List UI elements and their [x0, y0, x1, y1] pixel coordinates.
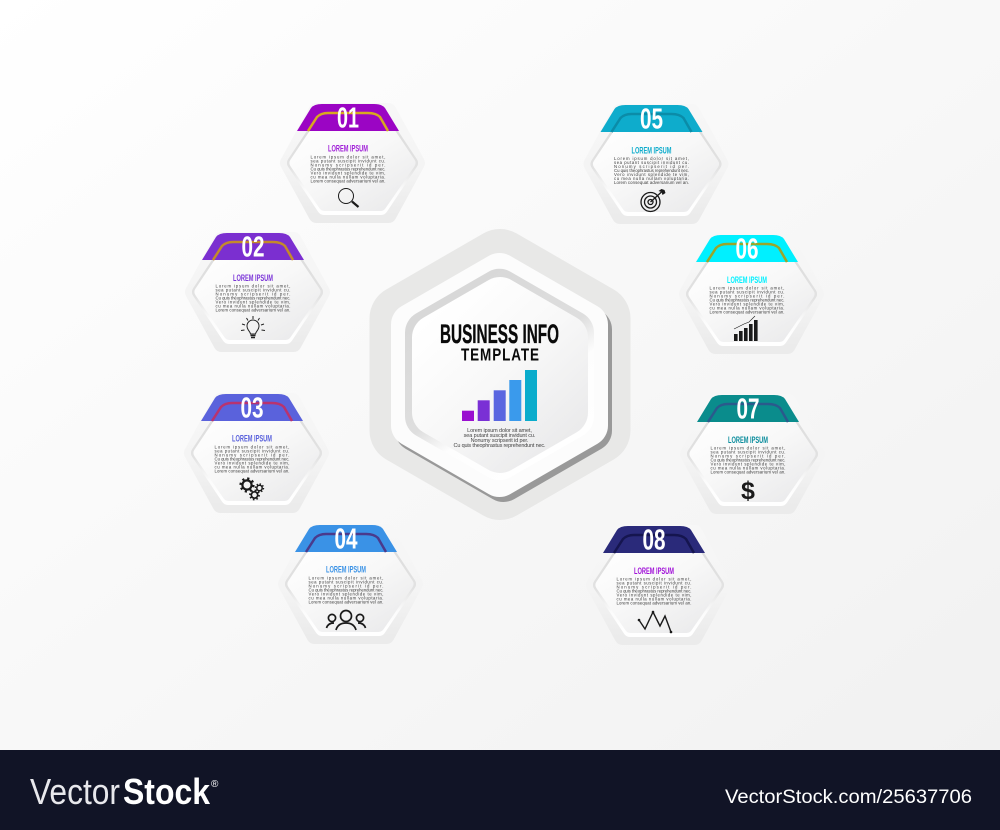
subtitle: TEMPLATE	[461, 346, 539, 365]
image id: VectorStock.com/25637706	[725, 786, 972, 808]
text block: cu mea nulla nullam voluptaria.	[310, 174, 386, 180]
text block: sea putant suscipit invidunt cu.	[710, 290, 784, 294]
panel: 02	[193, 232, 322, 344]
logo: Vector	[30, 771, 120, 812]
tab 03	[201, 394, 303, 421]
text block: Lorem ipsum dolor sit amet,	[614, 156, 689, 161]
heading: LOREM IPSUM	[632, 146, 672, 156]
icon: target	[641, 189, 666, 212]
panel: 05	[592, 104, 720, 216]
text block: Cu quis theophrastus reprehendunt nec.	[214, 456, 290, 462]
text block: Lorem consequat adversarium vel an.	[614, 180, 689, 185]
heading: LOREM IPSUM	[728, 435, 768, 446]
icon: people	[326, 610, 366, 630]
text block: Nonumy scripserit id per.	[215, 292, 291, 296]
text block: Lorem consequat adversarium vel an.	[308, 600, 384, 604]
text block: Vero invidunt splendide te vim,	[710, 302, 784, 306]
heading: LOREM IPSUM	[727, 275, 767, 286]
text block: Lorem ipsum dolor sit amet,	[710, 286, 784, 290]
panel: 06	[687, 234, 816, 346]
text block: Lorem ipsum dolor sit amet,	[308, 576, 384, 580]
panel: 05: 05	[640, 104, 663, 136]
text block: sea putant suscipit invidunt cu.	[308, 580, 384, 584]
text block: Nonumy scripserit id per.	[214, 452, 290, 458]
panel: 06: 06	[736, 234, 758, 266]
icon: growth bars	[734, 316, 758, 341]
text block: Vero invidunt splendide te vim,	[214, 460, 290, 466]
logo: Stock	[123, 771, 211, 812]
text block: Vero invidunt splendide te vim,	[216, 300, 290, 304]
text block: sea putant suscipit invidunt cu.	[216, 288, 290, 292]
text block	[308, 576, 384, 604]
panel: 08: 08	[642, 524, 666, 556]
caption: Lorem ipsum dolor sit amet,	[467, 428, 532, 434]
text block: Cu quis theophrastus reprehendunt nec.	[310, 166, 386, 172]
icon: gears	[240, 478, 264, 500]
text block: cu mea nulla nullam voluptaria.	[710, 466, 786, 470]
text block: sea putant suscipit invidunt cu.	[310, 158, 386, 164]
title: BUSINESS INFO	[440, 319, 559, 349]
text block	[616, 576, 692, 606]
tab 02	[202, 233, 304, 260]
text block: Cu quis theophrastus reprehendunt nec.	[710, 298, 784, 302]
caption: sea putant suscipit invidunt cu.	[464, 433, 536, 439]
heading: LOREM IPSUM	[232, 434, 272, 444]
tab 06	[696, 235, 798, 262]
panel: 07: 07	[736, 394, 760, 426]
panel: 02: 02	[242, 232, 264, 264]
text block: Vero invidunt splendide te vim,	[614, 172, 689, 177]
text block: Lorem ipsum dolor sit amet,	[710, 446, 786, 450]
text block: cu mea nulla nullam voluptaria.	[308, 596, 384, 600]
text block: Cu quis theophrastus reprehendunt nec.	[710, 458, 786, 462]
text block: Cu quis theophrastus reprehendunt nec.	[616, 588, 692, 594]
text block: Cu quis theophrastus reprehendunt nec.	[308, 588, 384, 592]
text block: Vero invidunt splendide te vim,	[710, 462, 786, 466]
heading: LOREM IPSUM	[233, 273, 273, 284]
panel: 04: 04	[334, 524, 358, 556]
icon: zigzag line	[638, 611, 672, 633]
tab 05	[600, 105, 702, 132]
text block: Lorem ipsum dolor sit amet,	[214, 444, 290, 450]
central hexagon	[403, 262, 597, 486]
footer bar	[0, 750, 1000, 830]
tab 07	[697, 395, 799, 422]
text block: Lorem consequat adversarium vel an.	[216, 308, 290, 312]
registered mark: ®	[211, 779, 219, 790]
text block: sea putant suscipit invidunt cu.	[614, 160, 689, 165]
text block	[214, 444, 290, 474]
text block	[710, 446, 786, 474]
panel: 08	[594, 524, 723, 637]
text block: Vero invidunt splendide te vim,	[308, 592, 384, 596]
icon: magnifier	[338, 188, 358, 207]
text block: Lorem consequat adversarium vel an.	[616, 600, 692, 606]
icon: light bulb	[241, 316, 265, 338]
text block: Nonumy scripserit id per.	[710, 454, 786, 458]
text block: Nonumy scripserit id per.	[308, 584, 384, 588]
caption: Nonumy scripserit id per.	[471, 438, 529, 444]
text block: Nonumy scripserit id per.	[616, 584, 692, 590]
heading: LOREM IPSUM	[634, 566, 674, 577]
text block: Lorem ipsum dolor sit amet,	[216, 284, 290, 288]
tab 08	[603, 526, 705, 553]
panel: 01: 01	[337, 102, 359, 134]
text block: cu mea nulla nullam voluptaria.	[614, 176, 689, 181]
text block: sea putant suscipit invidunt cu.	[616, 580, 692, 586]
panel: 04	[286, 524, 415, 636]
heading: LOREM IPSUM	[326, 564, 366, 576]
text block: Vero invidunt splendide te vim,	[616, 592, 692, 598]
text block	[310, 154, 386, 184]
text block	[614, 156, 689, 185]
text block: Lorem consequat adversarium vel an.	[214, 468, 290, 474]
logo	[30, 771, 211, 812]
panel: 03	[192, 392, 321, 505]
caption: Cu quis theophrastus reprehendunt nec.	[454, 443, 546, 449]
text block: Cu quis theophrastus reprehendunt nec.	[614, 168, 689, 173]
panel: 03: 03	[240, 392, 264, 424]
text block: Lorem consequat adversarium vel an.	[710, 470, 786, 474]
tab 01	[297, 104, 399, 131]
text block: Cu quis theophrastus reprehendunt nec.	[216, 296, 290, 300]
text block	[216, 284, 290, 312]
text block: sea putant suscipit invidunt cu.	[214, 448, 290, 454]
caption	[454, 428, 546, 449]
heading: LOREM IPSUM	[328, 144, 368, 154]
text block: cu mea nulla nullam voluptaria.	[214, 464, 290, 470]
icon: dollar: $	[741, 477, 755, 505]
text block	[710, 286, 784, 314]
bar chart	[462, 370, 537, 421]
text block: Nonumy scripserit id per.	[310, 162, 386, 168]
text block: Lorem ipsum dolor sit amet,	[616, 576, 692, 582]
text block: cu mea nulla nullam voluptaria.	[216, 304, 290, 308]
text block: sea putant suscipit invidunt cu.	[710, 450, 786, 454]
tab 04	[295, 525, 397, 552]
text block: Vero invidunt splendide te vim,	[310, 170, 386, 176]
text block: cu mea nulla nullam voluptaria.	[616, 596, 692, 602]
text block: Lorem consequat adversarium vel an.	[310, 178, 386, 184]
text block: Nonumy scripserit id per.	[614, 164, 689, 169]
text block: Lorem consequat adversarium vel an.	[710, 310, 784, 314]
panel: 07	[688, 394, 817, 506]
text block: cu mea nulla nullam voluptaria.	[710, 306, 784, 310]
text block: Nonumy scripserit id per.	[709, 294, 785, 298]
text block: Lorem ipsum dolor sit amet,	[310, 154, 386, 160]
panel: 01	[288, 102, 417, 215]
